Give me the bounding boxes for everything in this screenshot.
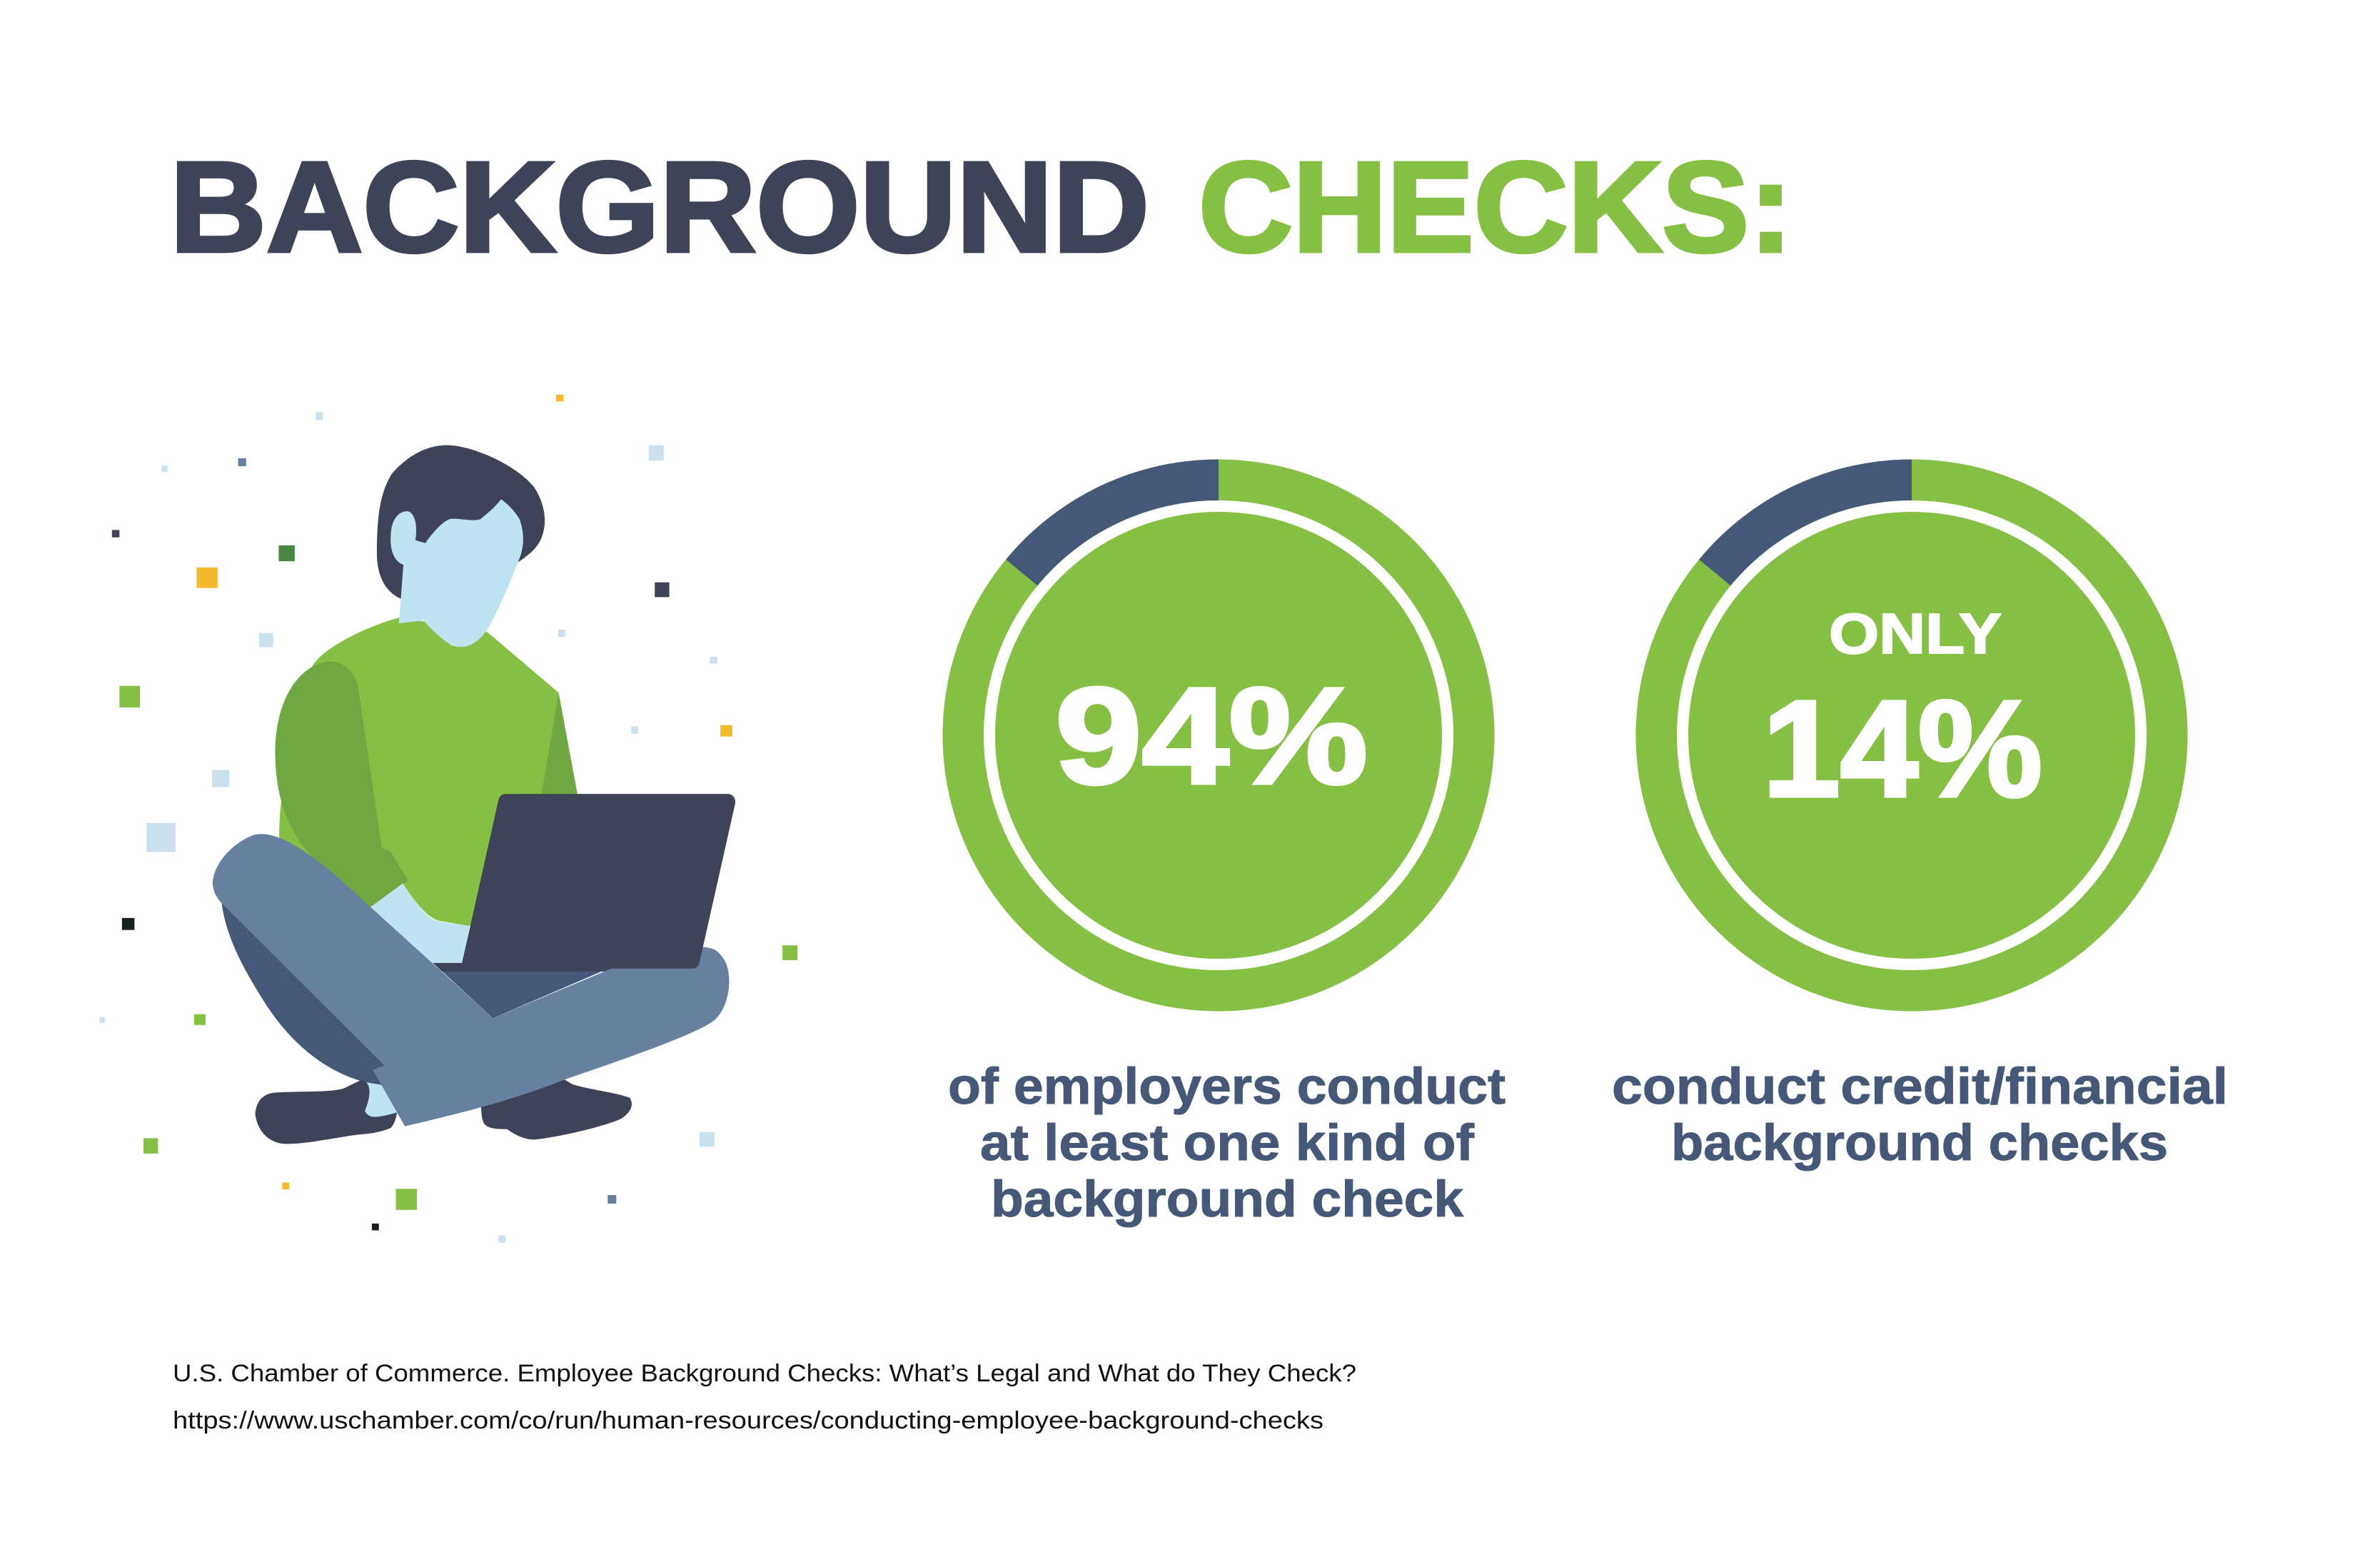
title: [170, 136, 1792, 279]
far sleeve: [540, 692, 578, 798]
front legs: [213, 834, 729, 1127]
hair: [377, 445, 545, 599]
illustration: person with laptop and confetti squares: [99, 395, 797, 1243]
shirt: [279, 618, 559, 926]
source citation: [173, 1360, 1356, 1434]
navy segment: [1699, 460, 1912, 585]
face: [390, 499, 523, 647]
caption: 14%: background checks: [1671, 1115, 2168, 1172]
far leg: [221, 903, 397, 1085]
donut chart: 14%: [1636, 460, 2187, 1011]
left shoe: [255, 1079, 397, 1144]
caption: 14%: [1612, 1059, 2228, 1172]
forearm: [370, 883, 470, 966]
right shoe: [481, 1079, 632, 1139]
title: CHECKS:: [1199, 136, 1792, 279]
value: 94%: [1055, 659, 1368, 812]
caption: 94%: of employers conduct: [948, 1059, 1506, 1115]
shirt sleeve: [275, 662, 408, 907]
left foot skin: [362, 1082, 399, 1122]
value: 14%: [1763, 672, 2042, 825]
caption: 94%: background check: [991, 1172, 1464, 1228]
caption: 14%: conduct credit/financial: [1612, 1059, 2228, 1115]
laptop: [433, 794, 735, 972]
confetti squares: [99, 395, 797, 1243]
lap shadow: [433, 963, 615, 1018]
caption: 94%: [948, 1059, 1506, 1228]
donut chart: 94%: [942, 460, 1495, 1011]
only label: ONLY: [1829, 602, 2002, 665]
source citation: U.S. Chamber of Commerce. Employee Background Checks: What’s Legal and What do They Check?: [173, 1360, 1356, 1387]
caption: 94%: at least one kind of: [980, 1115, 1474, 1172]
source citation: https://www.uschamber.com/co/run/human-resources/conducting-employee-background-checks: [173, 1407, 1323, 1434]
navy segment: [1006, 460, 1219, 585]
title: BACKGROUND: [170, 136, 1149, 279]
